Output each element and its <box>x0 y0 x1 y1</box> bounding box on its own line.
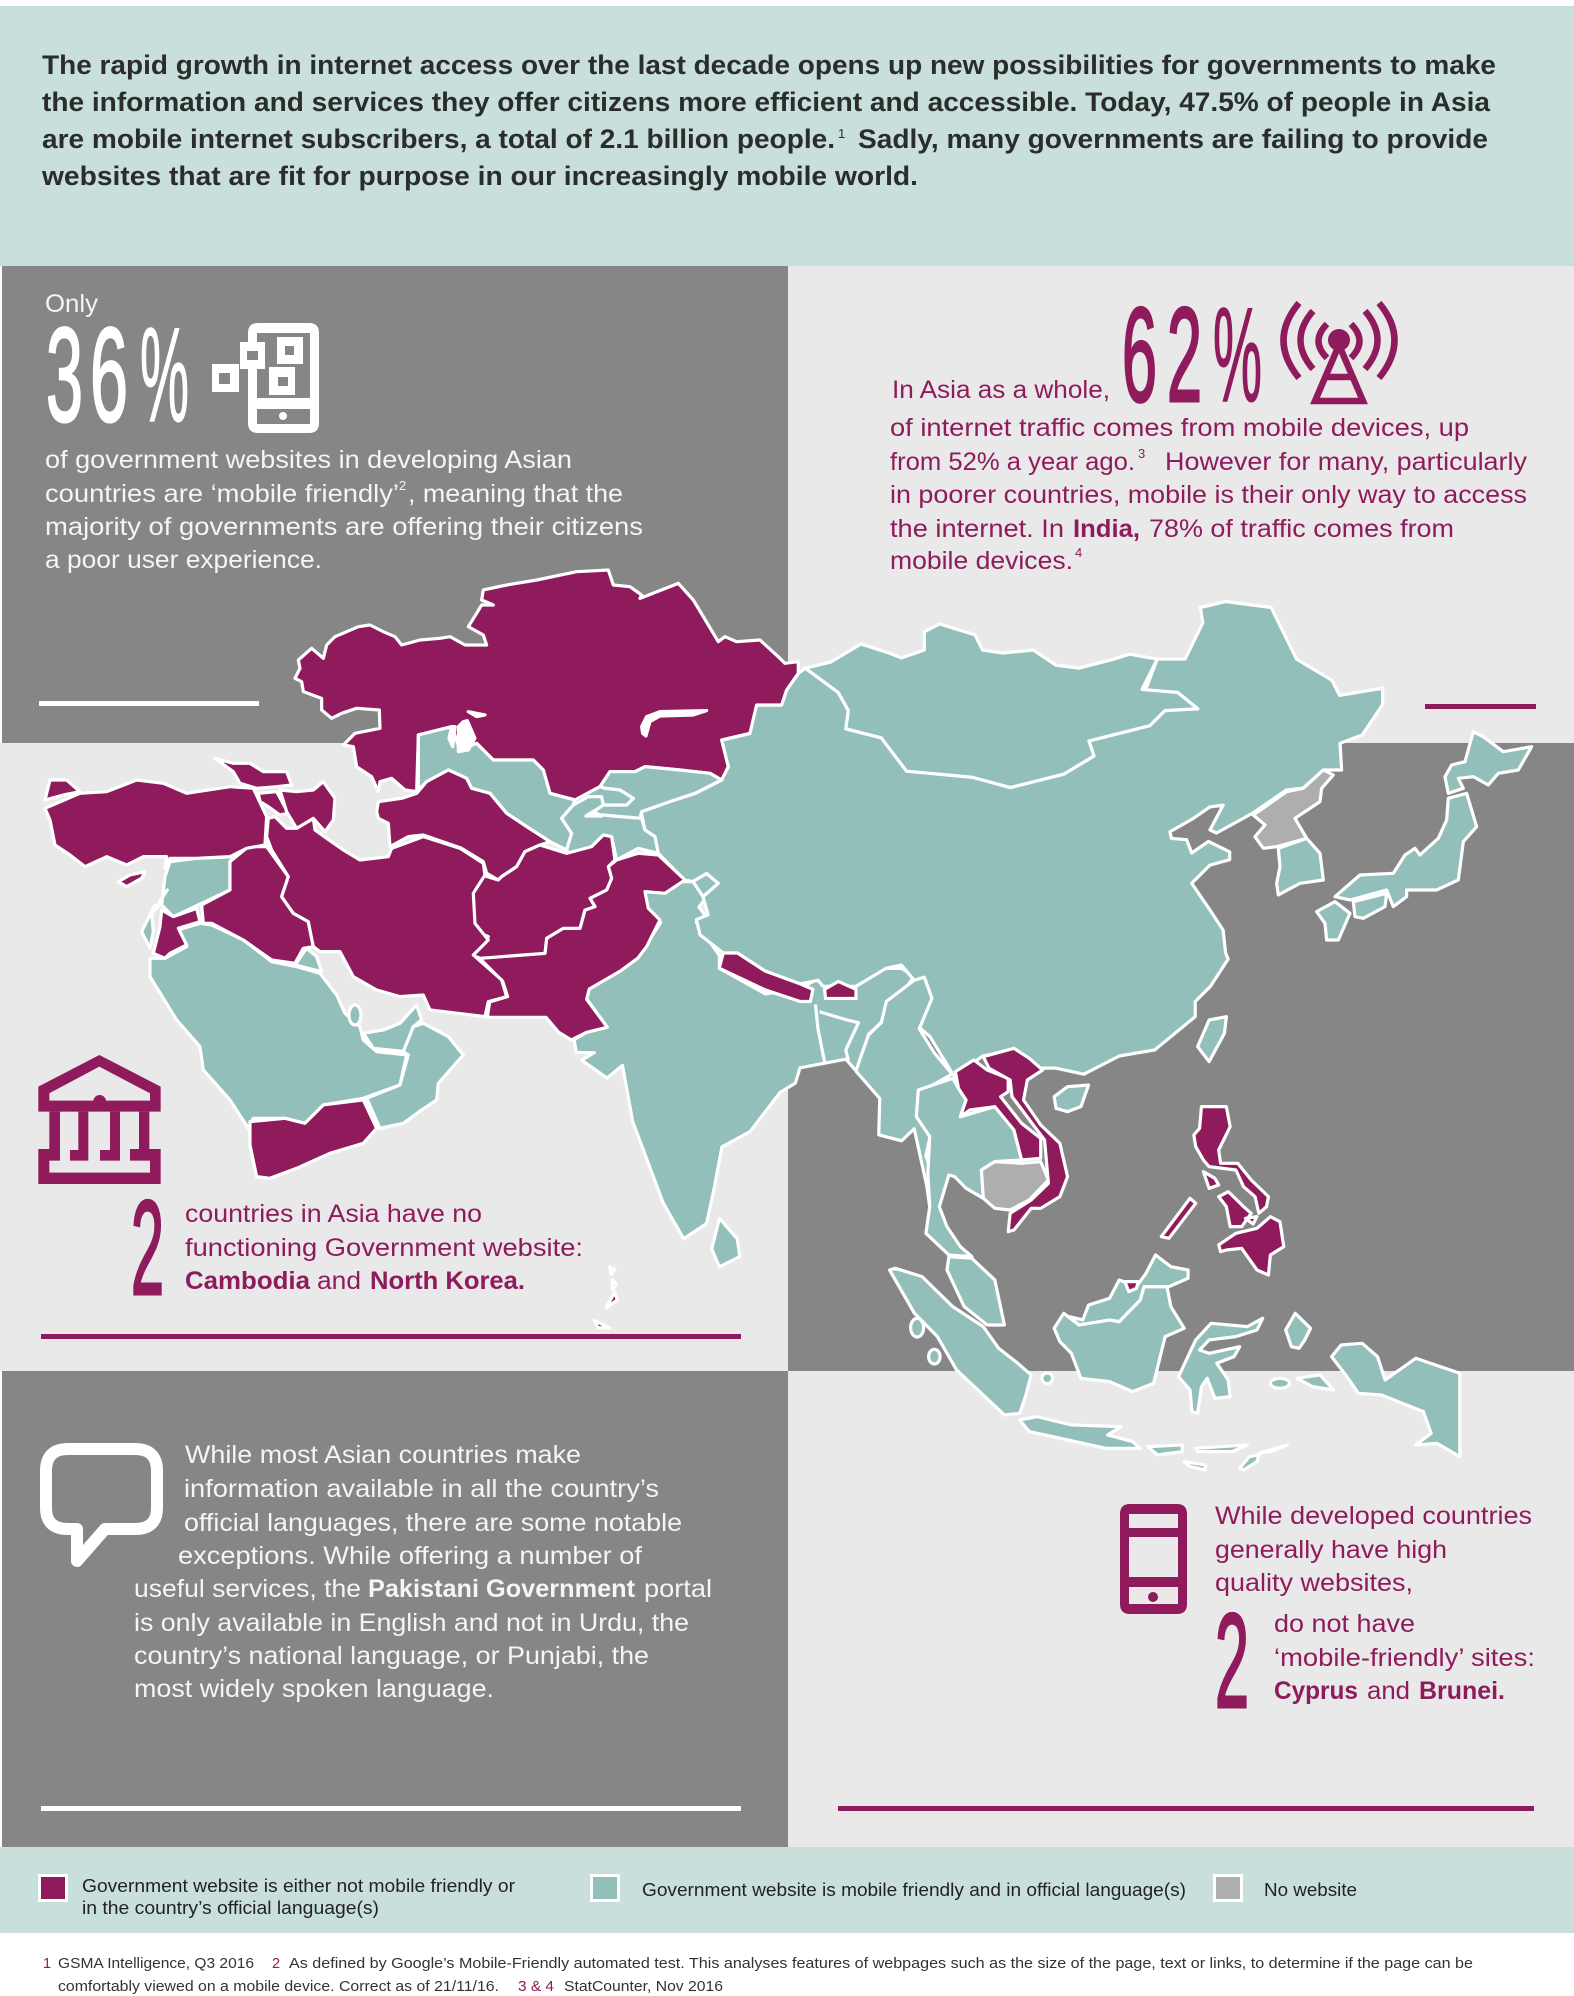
country: Sri Lanka <box>712 1218 740 1267</box>
map: China, Mongolia and Himalaya <box>641 602 1383 1204</box>
country: North Korea <box>1253 770 1333 848</box>
country: Kazakhstan <box>295 570 798 800</box>
panel: 36% mobile friendly <box>2 266 788 743</box>
label: only: Only <box>45 290 99 318</box>
panel: map background dark <box>788 743 1574 1371</box>
text block: 62% description: 3 <box>1138 446 1145 461</box>
region: Kashmir outline <box>693 874 718 897</box>
text block: 36% description: 2 <box>399 478 406 493</box>
text block: 36% description <box>45 446 643 574</box>
text block: 62% description: the internet. In <box>890 515 1064 543</box>
text block: not mobile friendly: ‘mobile-friendly’ sites: <box>1274 1644 1535 1672</box>
country: South Korea <box>1277 838 1323 895</box>
text block: no website: and <box>317 1267 361 1295</box>
Bangladesh borders <box>815 1004 858 1062</box>
intro text: 1 <box>838 126 845 141</box>
country: Armenia <box>258 792 288 815</box>
text block: 36% description: of government websites in developing Asian <box>45 446 572 474</box>
country: Afghanistan <box>472 835 615 958</box>
lakes: Balkhash and Aral <box>449 711 707 816</box>
country: Indonesia <box>890 1268 1460 1470</box>
icon: smartphone button <box>1148 1592 1158 1602</box>
intro text: The rapid growth in internet access over the last decade opens up new possibilities for governments to make <box>42 50 1496 80</box>
text block: not mobile friendly: and <box>1367 1677 1410 1705</box>
text block: not mobile friendly: Brunei. <box>1419 1677 1505 1705</box>
text block: 62% description: from 52% a year ago. <box>890 448 1135 476</box>
country: India <box>574 882 914 1239</box>
text block: 36% description: countries are ‘mobile friendly’ <box>45 480 399 508</box>
text block: developed countries: While developed countries <box>1215 1502 1532 1530</box>
text block: 36% description: a poor user experience. <box>45 546 322 574</box>
text block: languages: country’s national language, or Punjabi, the <box>134 1642 649 1670</box>
stat: 36%: 3 <box>46 301 83 450</box>
country: China <box>641 602 1383 1077</box>
country: Pakistan <box>480 853 685 1040</box>
country: Kuwait <box>295 948 322 972</box>
text block: not mobile friendly: Cyprus <box>1274 1677 1358 1705</box>
footnotes: StatCounter, Nov 2016 <box>564 1979 723 1995</box>
country: Maldives <box>594 1267 617 1328</box>
footnotes: 1 <box>43 1956 51 1972</box>
country: Iran <box>267 817 507 1017</box>
country: Turkmenistan <box>377 770 550 880</box>
country: Vietnam <box>983 1048 1068 1232</box>
country: Bhutan <box>825 981 856 998</box>
country: Oman <box>367 1023 463 1128</box>
stat: 62%: 2 <box>1167 281 1202 430</box>
text block: 62% description: 78% of traffic comes from <box>1149 515 1454 543</box>
legend: no website: No website <box>1264 1880 1357 1900</box>
stat: 36%: 6 <box>90 301 128 450</box>
label: in asia as a whole: In Asia as a whole, <box>892 376 1110 404</box>
text block: 62% description: 4 <box>1075 545 1082 560</box>
country: Uzbekistan <box>418 727 575 850</box>
text block: 62% description: However for many, particularly <box>1165 448 1528 476</box>
text block: languages: While most Asian countries make <box>185 1441 581 1469</box>
stat: 36% <box>46 301 189 450</box>
legend: mobile friendly: Government website is mobile friendly and in official language(s) <box>642 1880 1186 1900</box>
panel: 62% mobile traffic <box>788 266 1574 743</box>
country: Kyrgyzstan <box>588 767 722 818</box>
legend: not mobile friendly: in the country’s official language(s) <box>82 1898 379 1918</box>
footnotes: comfortably viewed on a mobile device. Correct as of 21/11/16. <box>58 1979 499 1995</box>
country: Israel <box>142 905 158 948</box>
country: Azerbaijan <box>280 782 335 832</box>
footnotes <box>43 1956 1473 1995</box>
text block: no website: functioning Government website: <box>185 1234 583 1262</box>
country: Mongolia <box>805 624 1198 788</box>
panel: developed countries <box>788 1371 1574 1847</box>
text block: languages: useful services, the <box>134 1575 361 1603</box>
country: Lebanon <box>158 890 167 904</box>
text block: 62% description: India, <box>1073 515 1140 543</box>
text block: languages: Pakistani Government <box>368 1575 636 1603</box>
intro text: are mobile internet subscribers, a total of 2.1 billion people. <box>42 124 835 154</box>
text block: 62% description: of internet traffic comes from mobile devices, up <box>890 414 1469 442</box>
icon: government building <box>38 1055 161 1184</box>
footnotes: GSMA Intelligence, Q3 2016 <box>58 1956 254 1972</box>
text block: languages: exceptions. While offering a number of <box>178 1542 642 1570</box>
island: Taiwan <box>1198 1017 1226 1062</box>
text block: not mobile friendly <box>1274 1610 1535 1705</box>
stat: 62%: 6 <box>1122 281 1157 430</box>
map: Middle East <box>45 758 507 1178</box>
panel: no functioning website <box>0 743 788 1371</box>
panel: intro band <box>0 6 1574 266</box>
text block: no website: Cambodia <box>185 1267 311 1295</box>
text block: languages: information available in all the country’s <box>184 1475 659 1503</box>
panel: no functioning website: 2 <box>131 1174 164 1323</box>
panel: 36% mobile friendly: % <box>140 301 189 450</box>
country: East Timor <box>1259 1445 1288 1453</box>
text block: developed countries: quality websites, <box>1215 1569 1413 1597</box>
country: Tajikistan <box>562 797 658 860</box>
country: Cyprus <box>118 872 145 887</box>
footnotes: 3 & 4 <box>518 1979 554 1995</box>
country: Brunei <box>1125 1282 1138 1292</box>
panel: official languages <box>2 1371 788 1847</box>
intro text: the information and services they offer citizens more efficient and accessible. Today, 47.5% of people in Asia <box>42 87 1491 117</box>
icon: speech bubble <box>46 1449 157 1561</box>
country: Cambodia <box>981 1162 1048 1210</box>
country: Myanmar <box>856 977 952 1204</box>
country: Georgia <box>215 758 292 788</box>
country: Saudi Arabia <box>150 923 407 1128</box>
intro text <box>41 50 1496 191</box>
text block: no website: North Korea. <box>370 1267 525 1295</box>
text block: 62% description: in poorer countries, mobile is their only way to access <box>890 481 1527 509</box>
intro text: websites that are fit for purpose in our increasingly mobile world. <box>41 161 918 191</box>
map: Korea and Japan <box>1253 732 1532 940</box>
country: Laos <box>955 1060 1041 1160</box>
legend: mobile friendly <box>592 1876 1186 1900</box>
text block: no website: countries in Asia have no <box>185 1200 482 1228</box>
text block: 62% description: mobile devices. <box>890 547 1073 575</box>
country: Qatar <box>349 1005 361 1025</box>
icon: antenna <box>1284 303 1394 401</box>
legend: not mobile friendly <box>40 1876 515 1918</box>
map: Southeast Asia <box>890 1017 1460 1470</box>
country: Turkey <box>45 780 267 868</box>
map: South Asia <box>574 882 914 1328</box>
icon: phone with app tiles <box>212 323 319 433</box>
map: Central Asia <box>295 570 798 1040</box>
text block: developed countries: generally have high <box>1215 1536 1447 1564</box>
intro text: Sadly, many governments are failing to provide <box>858 124 1488 154</box>
legend: no website <box>1214 1876 1357 1900</box>
stat: 62% <box>1122 281 1262 430</box>
text block: languages <box>134 1441 712 1703</box>
text block: no website <box>185 1200 583 1295</box>
text block: not mobile friendly: do not have <box>1274 1610 1415 1638</box>
country: Philippines <box>1161 1107 1284 1275</box>
text block: developed countries <box>1215 1502 1532 1597</box>
panel: developed countries: 2 <box>1215 1587 1249 1736</box>
country: UAE <box>363 1005 422 1052</box>
text block: languages: most widely spoken language. <box>134 1675 494 1703</box>
legend: not mobile friendly: Government website is either not mobile friendly or <box>82 1876 515 1896</box>
country: Iraq <box>202 847 313 963</box>
text block: 36% description: majority of governments are offering their citizens <box>45 513 643 541</box>
country: Syria <box>162 847 248 917</box>
island: Hainan <box>1054 1085 1089 1112</box>
country: Thailand <box>916 1078 1022 1257</box>
text block: languages: official languages, there are some notable <box>184 1509 682 1537</box>
country: Malaysia Borneo <box>1069 1255 1188 1325</box>
region: Fergana valley <box>573 787 633 815</box>
text block: languages: is only available in English and not in Urdu, the <box>134 1609 689 1637</box>
text block: 36% description: , meaning that the <box>408 480 623 508</box>
panel: 62% mobile traffic: % <box>1213 281 1262 430</box>
footnotes: 2 <box>272 1956 280 1972</box>
country: Jordan <box>153 908 200 958</box>
footnotes: As defined by Google’s Mobile-Friendly automated test. This analyses features of webpages such as the size of the page, text or links, to determine if the page can be <box>289 1956 1473 1972</box>
country: Nepal <box>719 953 813 1001</box>
country: Malaysia peninsula <box>947 1257 1004 1325</box>
text block: 62% description <box>890 414 1528 575</box>
country: Yemen <box>250 1100 377 1178</box>
text block: languages: portal <box>644 1575 712 1603</box>
icon: smartphone <box>1120 1504 1187 1614</box>
country: Japan <box>1317 732 1532 940</box>
legend <box>0 1847 1574 1933</box>
